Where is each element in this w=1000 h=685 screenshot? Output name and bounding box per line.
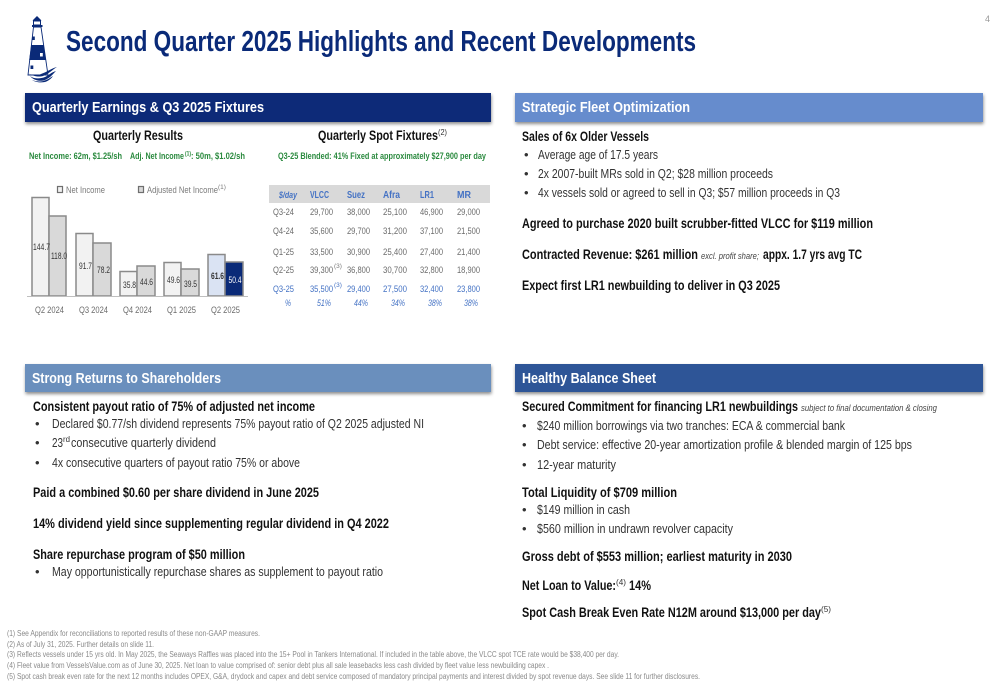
heading: quarterly results: Quarterly Results <box>93 128 183 143</box>
text: combined dividend: Paid a combined $0.60 per share dividend in June 2025 <box>33 485 319 500</box>
panel: strong returns to shareholders <box>25 364 491 579</box>
table: quarterly spot fixtures: 38,000 <box>347 207 370 218</box>
bar chart: net income: 61.6 <box>211 271 224 282</box>
bar chart: net income: Q4 2024 <box>123 305 152 316</box>
bar chart: net income <box>27 198 248 316</box>
table: quarterly spot fixtures: 34% <box>391 298 405 309</box>
table: quarterly spot fixtures: 30,900 <box>347 247 370 258</box>
footnotes <box>7 629 700 681</box>
table: quarterly spot fixtures: 27,400 <box>420 247 443 258</box>
table: quarterly spot fixtures: 39,300 <box>310 265 333 276</box>
table: quarterly spot fixtures: Q4-24 <box>273 226 294 237</box>
text: net income summary: Net Income: 62m, $1.25/sh <box>29 151 122 162</box>
table: quarterly spot fixtures: 29,400 <box>347 284 370 295</box>
text: secured commitment: subject to final documentation & closing <box>801 403 938 414</box>
text: payout ratio: rd <box>63 435 70 444</box>
text: payout ratio <box>33 399 424 470</box>
table: quarterly spot fixtures: Q3-24 <box>273 207 294 218</box>
table: quarterly spot fixtures: 44% <box>354 298 368 309</box>
bar chart: net income: 49.6 <box>167 275 180 286</box>
text: gross debt: Gross debt of $553 million; earliest maturity in 2030 <box>522 549 792 564</box>
table: quarterly spot fixtures: 29,700 <box>310 207 333 218</box>
text: sales of older vessels: Sales of 6x Older Vessels <box>522 129 649 144</box>
legend <box>58 184 226 196</box>
table: quarterly spot fixtures: 35,500 <box>310 284 333 295</box>
heading: quarterly spot fixtures: Quarterly Spot Fixtures <box>318 128 438 143</box>
table: quarterly spot fixtures: VLCC <box>310 189 329 201</box>
text: VLCC purchase: Agreed to purchase 2020 built scrubber-fitted VLCC for $119 million <box>522 216 873 231</box>
text: secured commitment: 12-year maturity <box>537 458 617 472</box>
table: quarterly spot fixtures: 32,800 <box>420 265 443 276</box>
bar chart: net income: 39.5 <box>184 279 197 290</box>
bar chart: net income: 144.7 <box>33 242 50 253</box>
table: quarterly spot fixtures: 33,500 <box>310 247 333 258</box>
text: net income summary: : 50m, $1.02/sh <box>191 151 245 162</box>
text: secured commitment: $240 million borrowings via two tranches: ECA & commercial bank <box>537 419 846 433</box>
text: secured commitment: Debt service: effective 20-year amortization profile & blended margin of 125 bps <box>537 438 912 452</box>
panel: quarterly earnings and fixtures <box>25 93 491 316</box>
text: payout ratio: Consistent payout ratio of 75% of adjusted net income <box>33 399 315 414</box>
text: spot cash break even: Spot Cash Break Even Rate N12M around $13,000 per day <box>522 605 821 620</box>
text: total liquidity: $149 million in cash <box>537 503 630 517</box>
table: quarterly spot fixtures: 18,900 <box>457 265 480 276</box>
bar chart: net income: 44.6 <box>140 277 153 288</box>
text: secured commitment: • <box>522 437 527 452</box>
table: quarterly spot fixtures: 21,400 <box>457 247 480 258</box>
text: share repurchase <box>33 547 383 579</box>
text: contracted revenue: appx. 1.7 yrs avg TC <box>763 247 862 262</box>
text: share repurchase: May opportunistically repurchase shares as supplement to payout ratio <box>52 565 383 579</box>
table: quarterly spot fixtures: (3) <box>334 263 342 270</box>
table: quarterly spot fixtures: 37,100 <box>420 226 443 237</box>
footnotes: (1) See Appendix for reconciliations to reported results of these non-GAAP measures. <box>7 629 260 638</box>
bar chart: net income: 50.4 <box>228 275 242 286</box>
table: quarterly spot fixtures: 25,400 <box>383 247 407 258</box>
table: quarterly spot fixtures: 46,900 <box>420 207 443 218</box>
table: quarterly spot fixtures: 36,800 <box>347 265 370 276</box>
panel: strategic fleet optimization <box>515 93 983 293</box>
heading: strong returns: Strong Returns to Shareholders <box>32 370 221 387</box>
text: sales of older vessels <box>522 129 840 200</box>
text: payout ratio: • <box>35 435 40 450</box>
footnotes: (4) Fleet value from VesselsValue.com as of June 30, 2025. Net loan to value comprised of: senior debt plus all sale leasebacks less cash divided by fleet value less newbuilding capex . <box>7 661 549 670</box>
footnotes: (2) As of July 31, 2025. Further details on slide 11. <box>7 640 154 649</box>
text: LR1 newbuilding: Expect first LR1 newbuilding to deliver in Q3 2025 <box>522 278 780 293</box>
legend: (1) <box>218 184 226 191</box>
table: quarterly spot fixtures: 35,600 <box>310 226 333 237</box>
table: quarterly spot fixtures: $/day <box>278 190 298 201</box>
heading: quarterly earnings <box>25 93 491 122</box>
text: blended fixtures summary: Q3-25 Blended: 41% Fixed at approximately $27,900 per day <box>278 151 487 162</box>
text: sales of older vessels: Average age of 17.5 years <box>538 148 658 162</box>
text: net loan to value: (4) <box>616 578 626 587</box>
text: total liquidity: $560 million in undrawn revolver capacity <box>537 522 734 536</box>
text: sales of older vessels: 4x vessels sold or agreed to sell in Q3; $57 million proceeds in Q3 <box>538 186 840 200</box>
text: payout ratio: consecutive quarterly dividend <box>71 436 216 450</box>
text: sales of older vessels: 2x 2007-built MRs sold in Q2; $28 million proceeds <box>538 167 773 181</box>
text: total liquidity: Total Liquidity of $709 million <box>522 485 677 500</box>
table: quarterly spot fixtures: Q1-25 <box>273 247 294 258</box>
table: quarterly spot fixtures: MR <box>457 189 471 201</box>
table: quarterly spot fixtures: % <box>285 298 291 309</box>
table: quarterly spot fixtures: 38% <box>464 298 478 309</box>
table: quarterly spot fixtures: Q2-25 <box>273 265 294 276</box>
text: secured commitment <box>522 399 938 472</box>
table: quarterly spot fixtures: (3) <box>334 282 342 289</box>
text: share repurchase: • <box>35 564 40 579</box>
table: quarterly spot fixtures: 21,500 <box>457 226 480 237</box>
table: quarterly spot fixtures <box>269 185 490 309</box>
table: quarterly spot fixtures: 25,100 <box>383 207 407 218</box>
text: payout ratio: 4x consecutive quarters of payout ratio 75% or above <box>52 456 300 470</box>
text: payout ratio: • <box>35 416 40 431</box>
table: quarterly spot fixtures: 31,200 <box>383 226 407 237</box>
footnotes: (3) Reflects vessels under 15 yrs old. In May 2025, the Seaways Raffles was placed into the 15+ Pool in Tankers International. If included in the table above, the VLCC spot TCE rate would be $38,400 per day. <box>7 650 619 659</box>
text: total liquidity: • <box>522 502 527 517</box>
legend: Adjusted Net Income <box>147 185 218 196</box>
text: secured commitment: Secured Commitment for financing LR1 newbuildings <box>522 399 798 414</box>
bar chart: net income: 118.0 <box>51 251 67 262</box>
bar chart: net income: Q2 2024 <box>35 305 64 316</box>
bar chart: net income: 35.8 <box>123 280 136 291</box>
table: quarterly spot fixtures: Suez <box>347 189 365 201</box>
text: contracted revenue <box>522 247 862 262</box>
heading: strategic fleet optimization <box>515 93 983 122</box>
text: sales of older vessels: • <box>524 185 529 200</box>
heading: healthy balance sheet: Healthy Balance Sheet <box>522 370 656 387</box>
text: payout ratio: 23 <box>52 436 63 450</box>
icon: lighthouse logo <box>28 16 57 82</box>
bar chart: net income: Q1 2025 <box>167 305 196 316</box>
text: contracted revenue: excl. profit share; <box>701 251 759 262</box>
table: quarterly spot fixtures: 32,400 <box>420 284 443 295</box>
title: Second Quarter 2025 Highlights and Recent Developments <box>66 26 696 58</box>
text: spot cash break even: (5) <box>821 605 831 614</box>
text: secured commitment: • <box>522 418 527 433</box>
bar chart: net income: Q2 2025 <box>211 305 240 316</box>
text: net loan to value: Net Loan to Value: <box>522 578 616 593</box>
text: total liquidity: • <box>522 521 527 536</box>
legend: Net Income <box>66 185 105 196</box>
table: quarterly spot fixtures: Afra <box>383 189 400 201</box>
panel: healthy balance sheet <box>515 364 983 620</box>
text: net income summary: Adj. Net Income <box>130 151 184 162</box>
text: dividend yield: 14% dividend yield since supplementing regular dividend in Q4 2022 <box>33 516 389 531</box>
text: payout ratio: Declared $0.77/sh dividend represents 75% payout ratio of Q2 2025 adjusted NI <box>52 417 424 431</box>
table: quarterly spot fixtures: 51% <box>317 298 331 309</box>
text: share repurchase: Share repurchase program of $50 million <box>33 547 245 562</box>
text: sales of older vessels: • <box>524 166 529 181</box>
table: quarterly spot fixtures: 29,700 <box>347 226 370 237</box>
heading: strategic fleet optimization: Strategic Fleet Optimization <box>522 99 690 116</box>
table: quarterly spot fixtures: LR1 <box>420 189 434 201</box>
text: net income summary <box>29 151 245 162</box>
text: total liquidity <box>522 485 734 536</box>
text: net loan to value: 14% <box>629 578 651 593</box>
text: contracted revenue: Contracted Revenue: $261 million <box>522 247 698 262</box>
table: quarterly spot fixtures: 29,000 <box>457 207 480 218</box>
bar chart: net income: Q3 2024 <box>79 305 108 316</box>
table: quarterly spot fixtures: 38% <box>428 298 442 309</box>
heading: healthy balance sheet <box>515 364 983 392</box>
bar chart: net income: 91.7 <box>79 261 92 272</box>
table: quarterly spot fixtures: 30,700 <box>383 265 407 276</box>
page number: 4 <box>985 14 990 24</box>
text: payout ratio: • <box>35 455 40 470</box>
text: secured commitment: • <box>522 457 527 472</box>
text: sales of older vessels: • <box>524 147 529 162</box>
footnotes: (5) Spot cash break even rate for the next 12 months includes OPEX, G&A, drydock and capex and debt service composed of mandatory principal payments and interest divided by spot revenue days. See slide 11 for further disclosures. <box>7 672 700 681</box>
table: quarterly spot fixtures: Q3-25 <box>273 284 294 295</box>
heading: strong returns <box>25 364 491 392</box>
bar chart: net income: 78.2 <box>97 265 110 276</box>
table: quarterly spot fixtures: 27,500 <box>383 284 407 295</box>
table: quarterly spot fixtures: 23,800 <box>457 284 480 295</box>
text: net income summary: (1) <box>185 152 191 158</box>
heading: quarterly earnings: Quarterly Earnings & Q3 2025 Fixtures <box>32 99 264 116</box>
heading: quarterly spot fixtures: (2) <box>438 128 447 137</box>
